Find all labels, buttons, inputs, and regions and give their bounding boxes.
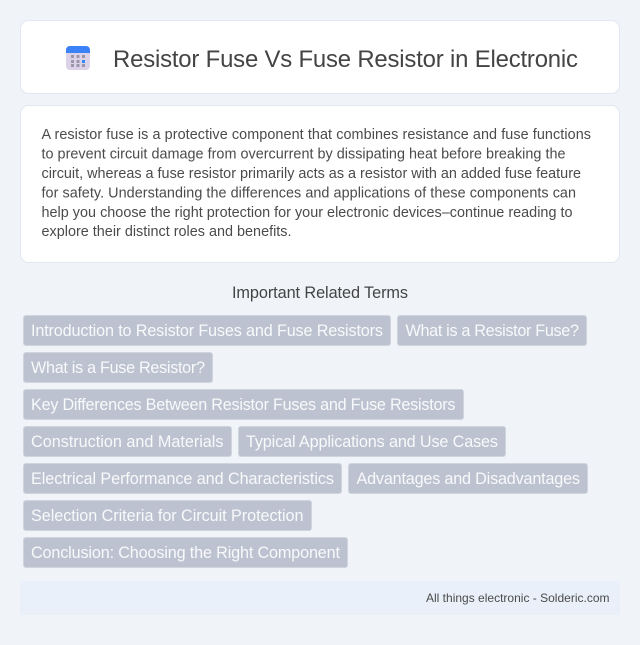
panel: header (20, 20, 620, 94)
tag: Introduction to Resistor Fuses and Fuse Resistors (31, 322, 383, 340)
tag (24, 538, 348, 568)
tag: What is a Fuse Resistor? (31, 359, 205, 377)
tag: Typical Applications and Use Cases (246, 433, 498, 451)
icon: calendar (66, 46, 90, 70)
tag: What is a Resistor Fuse? (406, 322, 579, 340)
footer (20, 581, 620, 615)
text block: description: to prevent circuit damage from overcurrent by dissipating heat before breaking the (42, 146, 566, 162)
tag (24, 500, 312, 530)
text block: description: for safety. Understanding the differences and applications of these components can (42, 186, 576, 202)
tag: Key Differences Between Resistor Fuses and Fuse Resistors (31, 396, 456, 414)
panel: description (20, 106, 620, 262)
tag (348, 464, 588, 494)
tag (24, 464, 342, 494)
text block: description: circuit, whereas a fuse resistor primarily acts as a resistor with an added fuse feature (42, 166, 581, 182)
tags: related terms (24, 316, 588, 568)
footer text: All things electronic - Solderic.com (426, 591, 610, 605)
text block: description (42, 127, 591, 240)
heading: related terms: Important Related Terms (232, 284, 408, 302)
title: Resistor Fuse Vs Fuse Resistor in Electronic (113, 46, 578, 73)
tag: Selection Criteria for Circuit Protection (31, 507, 304, 525)
tag (24, 390, 464, 420)
tag (238, 426, 506, 456)
tag: Conclusion: Choosing the Right Component (31, 544, 340, 562)
tag: Electrical Performance and Characteristics (31, 470, 334, 488)
tag: Advantages and Disadvantages (356, 470, 580, 488)
tag (24, 316, 390, 346)
tag (24, 426, 232, 456)
text block: description: help you choose the right protection for your electronic devices–continue reading to (42, 205, 572, 221)
text block: description: A resistor fuse is a protective component that combines resistance and fuse functions (42, 127, 591, 143)
tag (24, 352, 212, 382)
text block: description: explore their distinct roles and benefits. (42, 224, 292, 240)
tag (398, 316, 586, 346)
tag: Construction and Materials (31, 433, 224, 451)
